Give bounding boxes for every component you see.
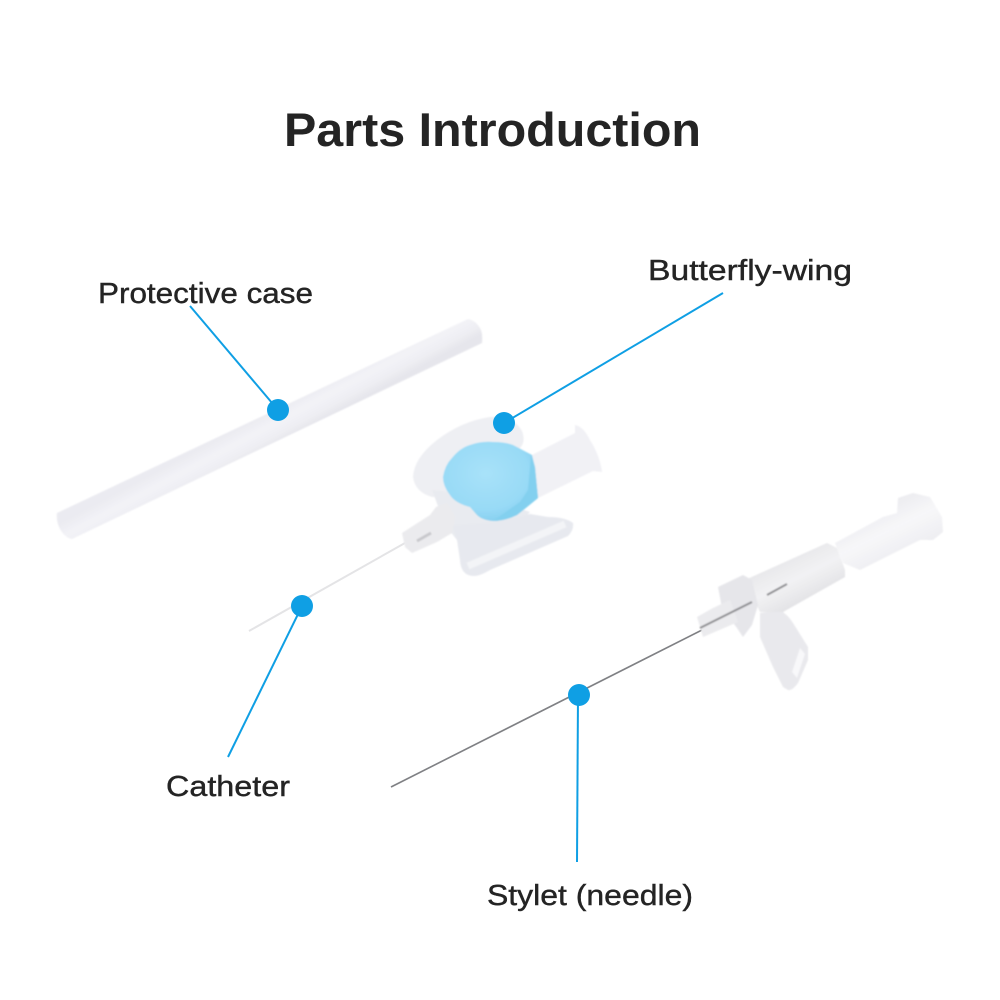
callout: stylet (needle): Stylet (needle) bbox=[487, 880, 693, 912]
part: stylet needle assembly bbox=[391, 493, 943, 787]
part: protective case tube bbox=[57, 319, 482, 539]
blue flashback cap bbox=[443, 442, 538, 521]
part: catheter with butterfly wings bbox=[249, 417, 602, 631]
callout: protective case bbox=[98, 278, 313, 421]
lower butterfly wing bbox=[452, 514, 573, 576]
callout: butterfly-wing: Butterfly-wing bbox=[648, 255, 852, 287]
needle shaft bbox=[391, 630, 702, 787]
title: Parts Introduction bbox=[284, 103, 701, 156]
connector barrel bbox=[530, 425, 602, 498]
finger wing bbox=[760, 610, 808, 690]
nose bbox=[697, 600, 738, 637]
callout: butterfly-wing bbox=[493, 255, 852, 434]
catheter hub bbox=[402, 503, 455, 553]
white plunger barrel bbox=[835, 493, 943, 570]
callout: protective case: Protective case bbox=[98, 278, 313, 310]
transparent barrel bbox=[745, 543, 845, 612]
needle inside body bbox=[700, 602, 752, 628]
flange bbox=[718, 575, 758, 637]
callout: catheter bbox=[166, 595, 313, 803]
central body bbox=[432, 490, 530, 565]
catheter tube bbox=[249, 543, 405, 631]
callout: stylet (needle) bbox=[487, 684, 693, 912]
callout: catheter: Catheter bbox=[166, 771, 290, 803]
upper butterfly wing bbox=[413, 417, 524, 497]
